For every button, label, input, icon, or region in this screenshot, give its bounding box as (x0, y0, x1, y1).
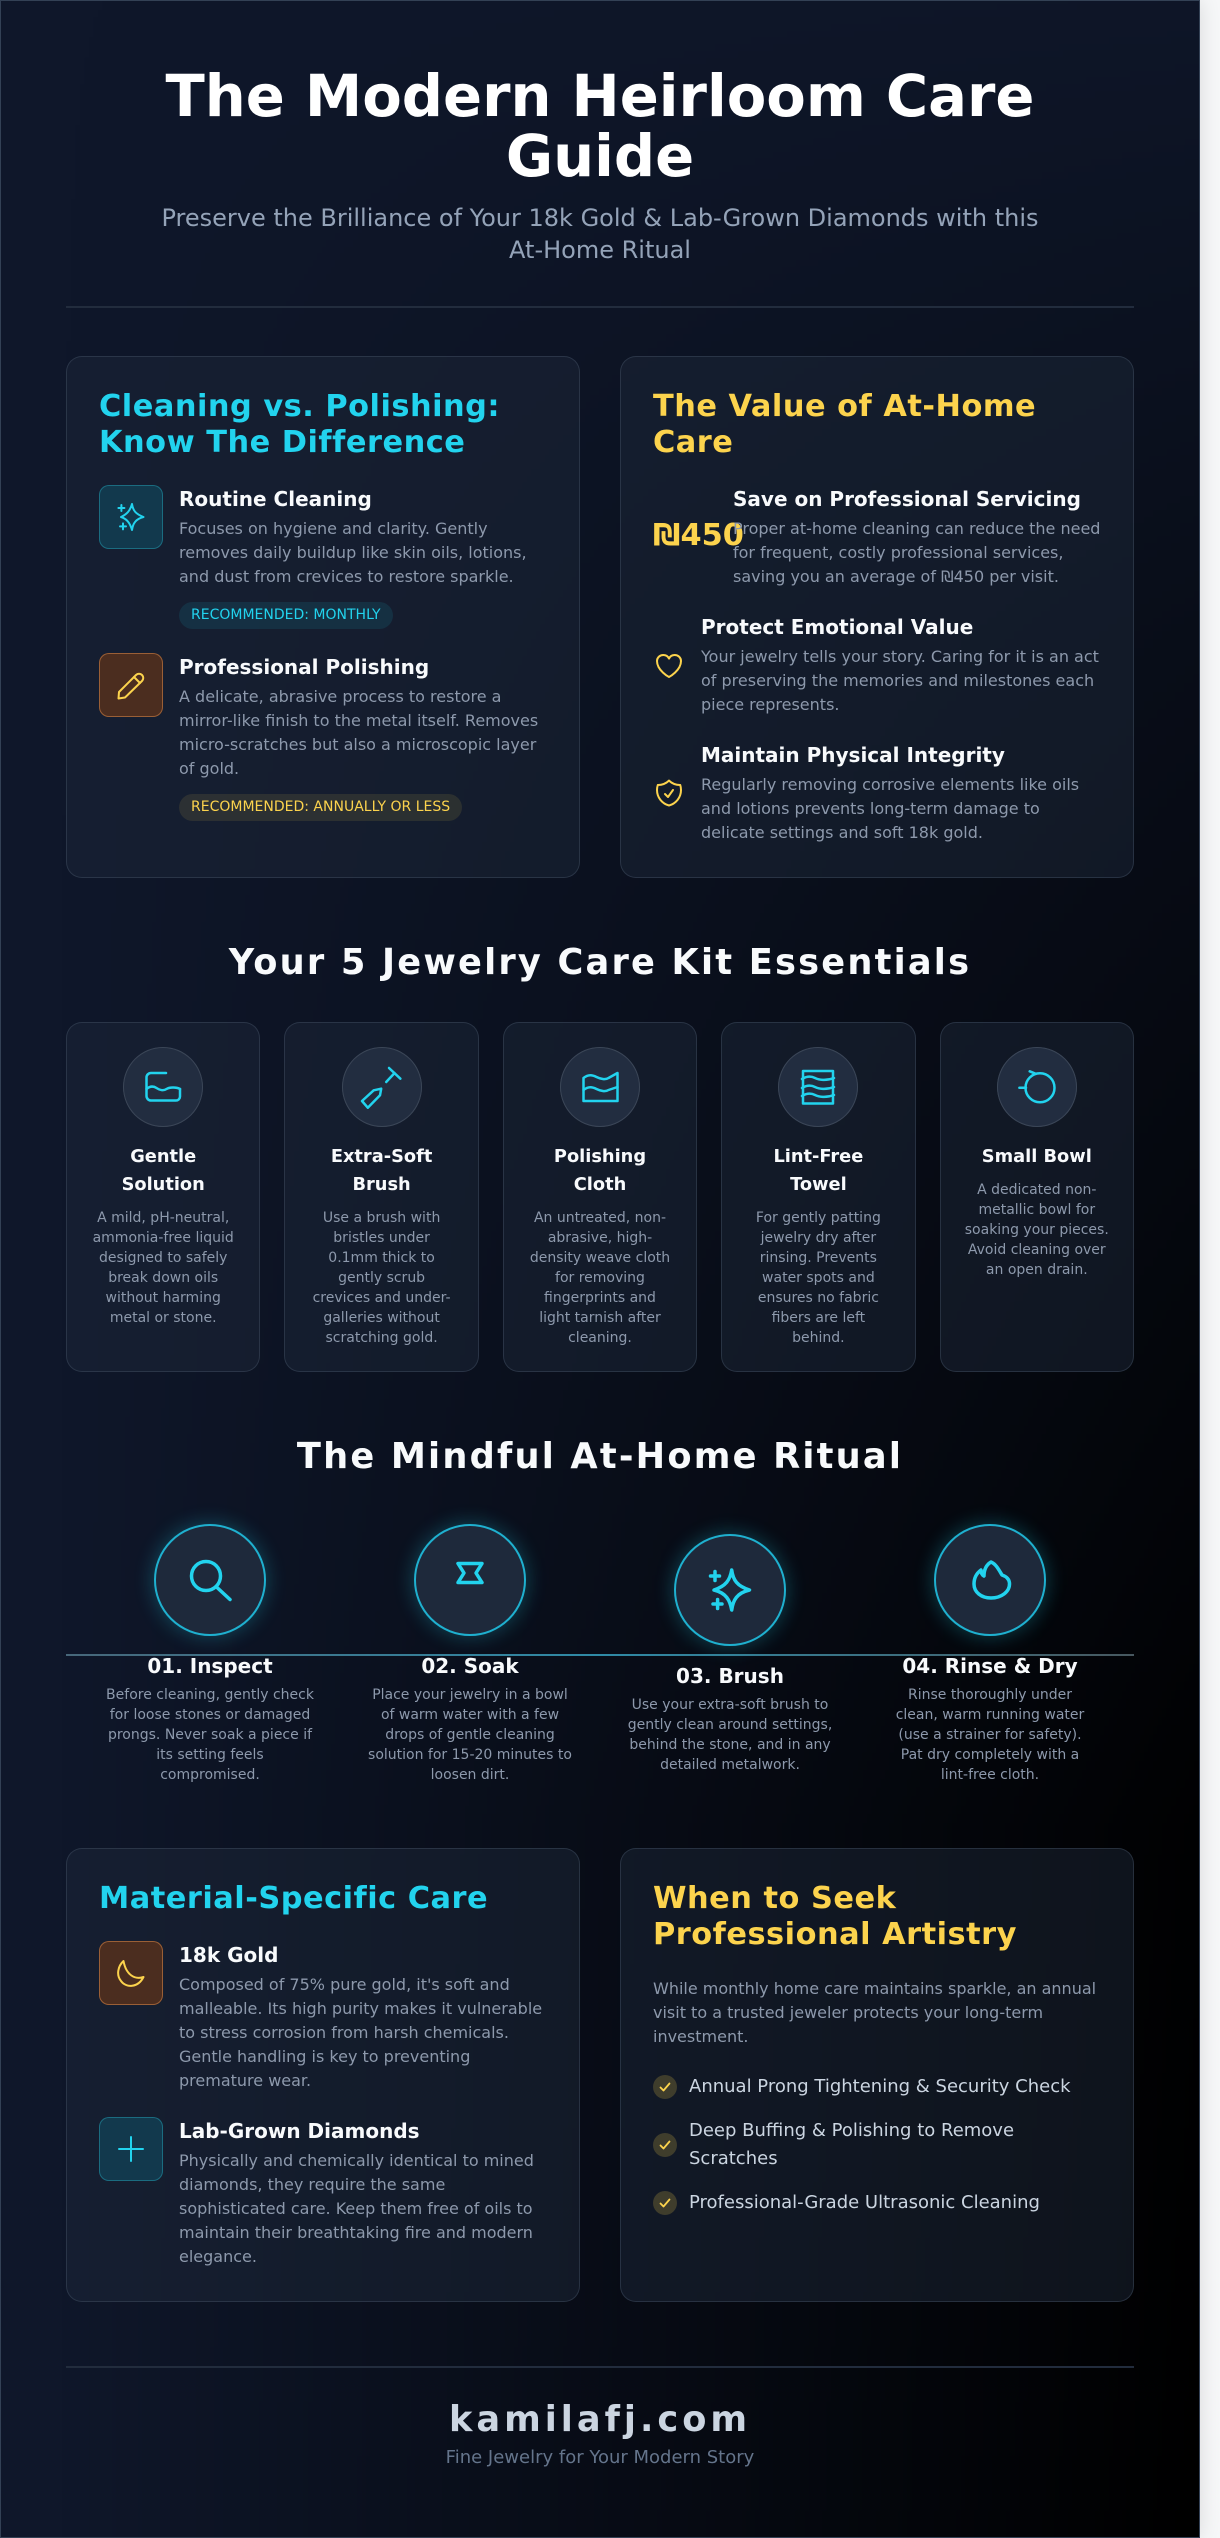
item: save on servicing (653, 487, 1100, 586)
icon: check (653, 2133, 677, 2157)
card title: Brush (352, 1174, 411, 1195)
card text: metallic bowl for (978, 1202, 1095, 1218)
step text: its setting feels (156, 1746, 264, 1762)
card text: an open drain. (986, 1262, 1088, 1278)
item title: Protect Emotional Value (701, 615, 973, 639)
icon: plus (99, 2117, 163, 2181)
step 3: brush (628, 1524, 832, 1772)
step text (628, 1696, 832, 1772)
card text: designed to safely (99, 1250, 227, 1266)
icon: flame (934, 1524, 1046, 1636)
step title: 02. Soak (421, 1654, 519, 1678)
intro text: investment. (653, 2026, 748, 2046)
panel: cleaning vs polishing (66, 356, 580, 878)
checklist item 2 (653, 2117, 1101, 2173)
icon: sparkle (674, 1534, 786, 1646)
step text: Before cleaning, gently check (106, 1686, 314, 1702)
item text: Proper at-home cleaning can reduce the need (733, 519, 1100, 538)
item text (689, 2117, 1014, 2173)
item text: delicate settings and soft 18k gold. (701, 822, 983, 842)
item text (733, 519, 1100, 586)
heading: cleaning vs polishing: Know The Difference (99, 425, 465, 460)
step text: compromised. (160, 1766, 260, 1782)
item title: Lab-Grown Diamonds (179, 2119, 420, 2143)
card text: for removing (555, 1270, 645, 1286)
step text: solution for 15-20 minutes to (368, 1746, 572, 1762)
item text (701, 774, 1079, 842)
item text: Professional-Grade Ultrasonic Cleaning (689, 2192, 1040, 2213)
heading: kit essentials: Your 5 Jewelry Care Kit Essentials (229, 942, 971, 983)
step 4: rinse and dry (896, 1514, 1084, 1782)
item: lab-grown diamonds (99, 2117, 534, 2266)
step text: (use a strainer for safety). (898, 1726, 1082, 1742)
step text: prongs. Never soak a piece if (108, 1726, 312, 1742)
checklist item 3 (653, 2189, 1101, 2217)
badge: annually: RECOMMENDED: ANNUALLY OR LESS (191, 799, 450, 815)
card title: Cloth (574, 1174, 626, 1195)
heading: value of at-home care: The Value of At-Home (653, 389, 1036, 424)
item text: Composed of 75% pure gold, it's soft and (179, 1974, 510, 1994)
card text: rinsing. Prevents (760, 1250, 877, 1266)
item text: Annual Prong Tightening & Security Check (689, 2076, 1071, 2097)
card text: jewelry dry after (761, 1230, 876, 1246)
step title: 04. Rinse & Dry (902, 1654, 1078, 1678)
card text (313, 1210, 451, 1346)
step title: 01. Inspect (147, 1654, 273, 1678)
card text: Use a brush with (323, 1210, 440, 1226)
icon: shield (656, 780, 682, 806)
card text: ammonia-free liquid (93, 1230, 234, 1246)
icon: check (653, 2191, 677, 2215)
card text (756, 1210, 881, 1346)
panel: material-specific care (66, 1848, 580, 2302)
item text (179, 1974, 542, 2090)
step text: behind the stone, and in any (629, 1736, 831, 1752)
step text: for loose stones or damaged (110, 1706, 310, 1722)
item text: diamonds, they require the same (179, 2174, 445, 2194)
panel: value of at-home care (620, 356, 1134, 878)
heading: cleaning vs polishing (99, 389, 500, 460)
item: maintain physical integrity (656, 743, 1079, 842)
step text: clean, warm running water (896, 1706, 1084, 1722)
step text (368, 1686, 572, 1782)
card title: Towel (790, 1174, 847, 1195)
step text: drops of gentle cleaning (385, 1726, 555, 1742)
item title: Save on Professional Servicing (733, 487, 1081, 511)
step text: detailed metalwork. (660, 1756, 800, 1772)
card text: An untreated, non- (534, 1210, 666, 1226)
card text: For gently patting (756, 1210, 881, 1226)
item: 18k gold (99, 1941, 542, 2090)
subtitle: At-Home Ritual (509, 236, 691, 264)
icon: sparkles (99, 485, 163, 549)
step text: of warm water with a few (381, 1706, 559, 1722)
card text: A dedicated non- (977, 1182, 1096, 1198)
card text: cleaning. (568, 1330, 632, 1346)
item text: Your jewelry tells your story. Caring for it is an act (701, 647, 1099, 666)
item text: elegance. (179, 2246, 257, 2266)
item text (701, 647, 1099, 714)
card text: without harming (106, 1290, 221, 1306)
step text: loosen dirt. (431, 1766, 509, 1782)
card text: abrasive, high- (548, 1230, 652, 1246)
item: professional polishing (99, 653, 538, 821)
kit cards (66, 1022, 1134, 1372)
heading: cleaning vs polishing: Cleaning vs. Polishing: (99, 389, 500, 424)
step text: gently clean around settings, (628, 1716, 832, 1732)
card text: bristles under (333, 1230, 430, 1246)
badge: monthly (179, 602, 393, 629)
card text: A mild, pH-neutral, (97, 1210, 229, 1226)
item text: removes daily buildup like skin oils, lotions, (179, 543, 527, 562)
item text: and dust from crevices to restore sparkle. (179, 567, 514, 586)
step text: Place your jewelry in a bowl (372, 1686, 568, 1702)
item text: to stress corrosion from harsh chemicals. (179, 2022, 509, 2042)
card title: Extra-Soft (331, 1146, 432, 1167)
icon: solution (123, 1047, 203, 1127)
badge: monthly: RECOMMENDED: MONTHLY (191, 607, 381, 623)
card text: 0.1mm thick to (328, 1250, 435, 1266)
item text: premature wear. (179, 2070, 311, 2090)
card text (93, 1210, 234, 1326)
item text (179, 687, 538, 778)
item text: mirror-like finish to the metal itself. Removes (179, 711, 538, 730)
step text: Use your extra-soft brush to (632, 1696, 828, 1712)
item text: Focuses on hygiene and clarity. Gently (179, 519, 488, 538)
item text: Scratches (689, 2148, 778, 2169)
badge: annually (179, 794, 462, 821)
item text: Gentle handling is key to preventing (179, 2046, 470, 2066)
item title: 18k Gold (179, 1943, 278, 1967)
card title: Polishing (554, 1146, 646, 1167)
heading: ritual: The Mindful At-Home Ritual (297, 1436, 903, 1477)
card: polishing cloth (503, 1022, 697, 1372)
card text: fibers are left (772, 1310, 865, 1326)
item text (179, 519, 527, 586)
step 2: soak (368, 1514, 572, 1782)
card title (554, 1146, 646, 1195)
card text: crevices and under- (313, 1290, 451, 1306)
card: lint-free towel (721, 1022, 916, 1372)
item text: maintain their breathtaking fire and modern (179, 2222, 533, 2242)
card title: Solution (122, 1174, 205, 1195)
card title: Lint-Free (773, 1146, 863, 1167)
item text: Physically and chemically identical to mined (179, 2150, 534, 2170)
card text: gently scrub (338, 1270, 425, 1286)
card text: ensures no fabric (758, 1290, 879, 1306)
card text (530, 1210, 670, 1346)
card text (965, 1182, 1109, 1278)
icon: brush (342, 1047, 422, 1127)
heading: professional artistry: When to Seek (653, 1881, 896, 1916)
card: gentle solution (66, 1022, 260, 1372)
step text: lint-free cloth. (941, 1766, 1039, 1782)
card text: soaking your pieces. (965, 1222, 1109, 1238)
footer tagline: Fine Jewelry for Your Modern Story (446, 2447, 754, 2468)
item text: sophisticated care. Keep them free of oils to (179, 2198, 533, 2218)
stat: 450 shekels: ₪450 (653, 518, 744, 553)
footer brand: kamilafj.com (449, 2399, 751, 2440)
card text: break down oils (108, 1270, 218, 1286)
item text: of preserving the memories and milestones each (701, 671, 1094, 690)
item: routine cleaning (99, 485, 527, 629)
icon: towel (778, 1047, 858, 1127)
item text: saving you an average of ₪450 per visit. (733, 567, 1059, 586)
subtitle (161, 204, 1039, 264)
item text: A delicate, abrasive process to restore a (179, 687, 501, 706)
ritual timeline (66, 1514, 1134, 1782)
icon: heart (656, 654, 682, 678)
step text (896, 1686, 1084, 1782)
card title (773, 1146, 863, 1195)
item: protect emotional value (656, 615, 1099, 714)
card text: fingerprints and (544, 1290, 656, 1306)
intro text: While monthly home care maintains sparkle, an annual (653, 1978, 1096, 1998)
item text: and lotions prevents long-term damage to (701, 798, 1040, 818)
card title (331, 1146, 432, 1195)
icon: moon (99, 1941, 163, 2005)
card text: scratching gold. (326, 1330, 438, 1346)
icon: pencil (99, 653, 163, 717)
title (166, 62, 1034, 190)
item title: Maintain Physical Integrity (701, 743, 1005, 767)
card: extra-soft brush (284, 1022, 479, 1372)
item text: malleable. Its high purity makes it vulnerable (179, 1998, 542, 2018)
panel: professional artistry (620, 1848, 1134, 2302)
card title: Small Bowl (982, 1146, 1092, 1167)
item title: Routine Cleaning (179, 487, 372, 511)
item text: micro-scratches but also a microscopic layer (179, 735, 536, 754)
icon: bowl (997, 1047, 1077, 1127)
item text (179, 2150, 534, 2266)
card: small bowl (940, 1022, 1134, 1372)
intro text (653, 1976, 1096, 2048)
card text: behind. (792, 1330, 845, 1346)
icon: magnifier (154, 1524, 266, 1636)
card text: water spots and (762, 1270, 875, 1286)
card text: Avoid cleaning over (968, 1242, 1106, 1258)
intro text: visit to a trusted jeweler protects your long-term (653, 2002, 1043, 2022)
card text: galleries without (323, 1310, 440, 1326)
heading: value of at-home care: Care (653, 425, 733, 460)
subtitle: Preserve the Brilliance of Your 18k Gold & Lab-Grown Diamonds with this (161, 204, 1039, 232)
heading: professional artistry (653, 1881, 1017, 1952)
step text: Rinse thoroughly under (908, 1686, 1072, 1702)
card text: metal or stone. (110, 1310, 217, 1326)
icon: hourglass (414, 1524, 526, 1636)
title: Guide (506, 122, 694, 190)
checklist item 1 (653, 2073, 1101, 2101)
heading: material care: Material-Specific Care (99, 1881, 488, 1916)
card text: density weave cloth (530, 1250, 670, 1266)
item text: Deep Buffing & Polishing to Remove (689, 2120, 1014, 2141)
step title: 03. Brush (676, 1664, 784, 1688)
step 1: inspect (106, 1514, 314, 1782)
title: The Modern Heirloom Care (166, 62, 1034, 130)
item text: for frequent, costly professional services, (733, 543, 1063, 562)
heading: value of at-home care (653, 389, 1036, 460)
item text: of gold. (179, 759, 239, 778)
step text (106, 1686, 314, 1782)
item title: Professional Polishing (179, 655, 429, 679)
card text: light tarnish after (539, 1310, 661, 1326)
card title (122, 1146, 205, 1195)
icon: cloth (560, 1047, 640, 1127)
step text: Pat dry completely with a (901, 1746, 1079, 1762)
icon: check (653, 2075, 677, 2099)
heading: professional artistry: Professional Artistry (653, 1917, 1017, 1952)
item text: piece represents. (701, 695, 839, 714)
card title: Gentle (130, 1146, 196, 1167)
item text: Regularly removing corrosive elements like oils (701, 774, 1079, 794)
